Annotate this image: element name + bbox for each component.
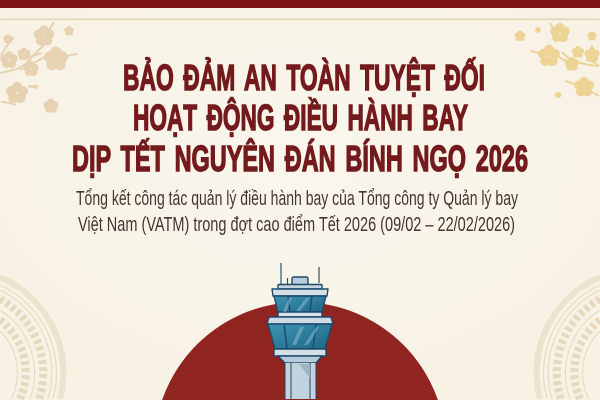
top banner bar [0, 0, 600, 8]
icon: apricot blossom branch left [0, 22, 77, 113]
subtitle [76, 188, 518, 236]
icon: bronze drum motif right [537, 277, 600, 399]
red sun circle [162, 302, 438, 400]
icon: apricot blossom branch right [515, 23, 600, 98]
top rule line [0, 18, 600, 20]
icon: bronze drum motif left [0, 277, 63, 399]
icon: air traffic control tower [267, 263, 333, 399]
title [72, 56, 528, 179]
